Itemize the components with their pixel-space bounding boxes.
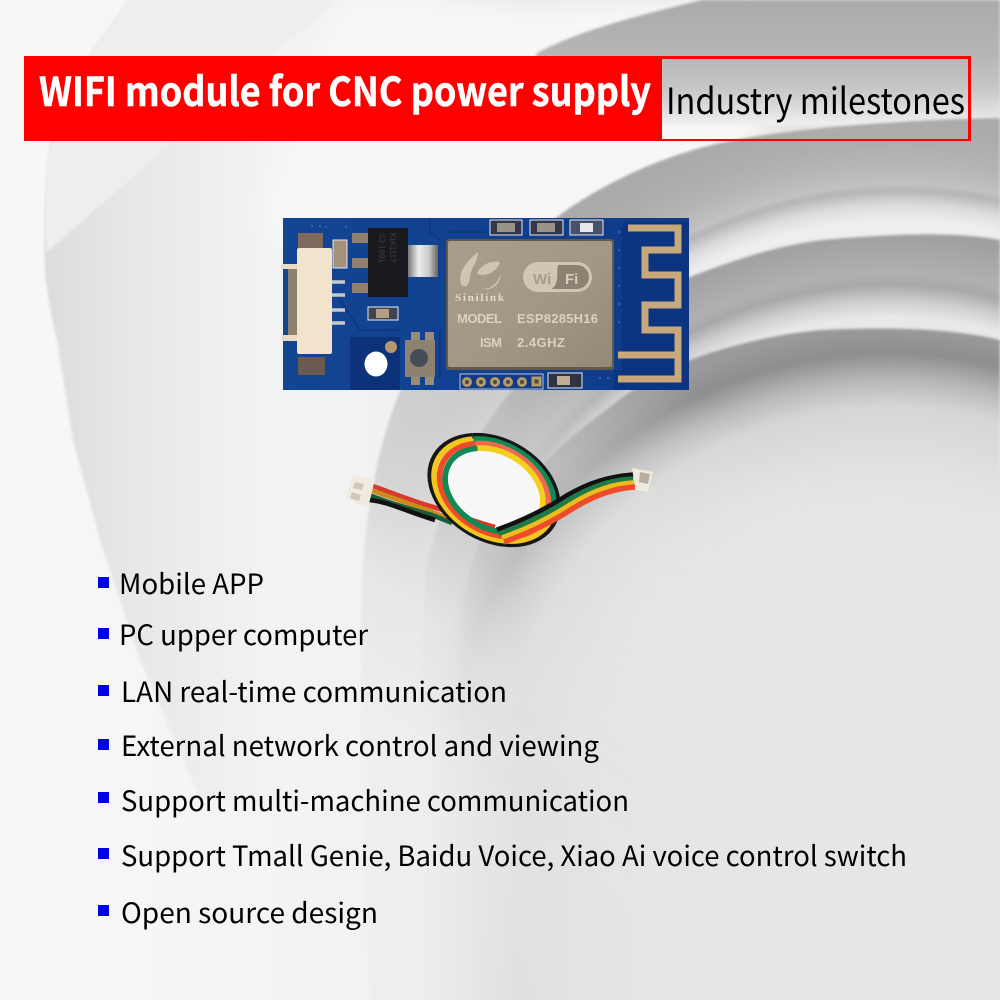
sinilink logo xyxy=(460,252,501,289)
esp module: Fi xyxy=(565,271,578,288)
antenna xyxy=(618,228,678,379)
connection cable xyxy=(346,414,653,566)
loop interior highlight xyxy=(433,434,555,546)
esp module: ISM xyxy=(480,335,502,350)
connector xyxy=(281,233,345,375)
esp module: 2.4GHZ xyxy=(517,335,565,350)
title: WIFI module for CNC power supply xyxy=(39,60,651,118)
subtitle: Industry milestones xyxy=(666,73,965,125)
bullet: external network: External network control and viewing xyxy=(121,725,599,765)
esp module: Sinilink xyxy=(455,292,505,304)
push button xyxy=(405,332,435,385)
bullet: multi-machine: Support multi-machine communication xyxy=(121,780,629,820)
regulator: KIA1117 xyxy=(388,233,397,263)
esp module xyxy=(446,239,614,370)
right tail wires xyxy=(497,475,635,542)
left plug xyxy=(346,476,375,508)
bullet: voice control: Support Tmall Genie, Baidu Voice, Xiao Ai voice control switch xyxy=(121,835,907,875)
small components xyxy=(333,220,603,388)
bullet: mobile app: Mobile APP xyxy=(119,563,264,603)
feature list xyxy=(98,563,907,932)
module markings: MODEL xyxy=(457,311,502,326)
WiFi circuit board xyxy=(281,218,689,390)
bullet: open source: Open source design xyxy=(121,892,378,932)
mounting hole xyxy=(364,352,388,376)
regulator: S3 1891 xyxy=(377,233,386,263)
wire loop xyxy=(411,414,577,566)
header holes xyxy=(460,374,543,389)
left tail wires xyxy=(366,485,495,527)
header bar xyxy=(24,56,971,141)
esp module: Wi xyxy=(533,271,551,288)
bullet: pc upper computer: PC upper computer xyxy=(119,614,368,654)
bullet: lan: LAN real-time communication xyxy=(121,671,507,711)
esp module: ESP8285H16 xyxy=(517,311,598,326)
header red banner xyxy=(24,56,971,141)
pcb xyxy=(283,218,689,390)
regulator xyxy=(368,228,438,297)
right plug xyxy=(632,468,653,492)
wifi badge xyxy=(523,262,592,292)
